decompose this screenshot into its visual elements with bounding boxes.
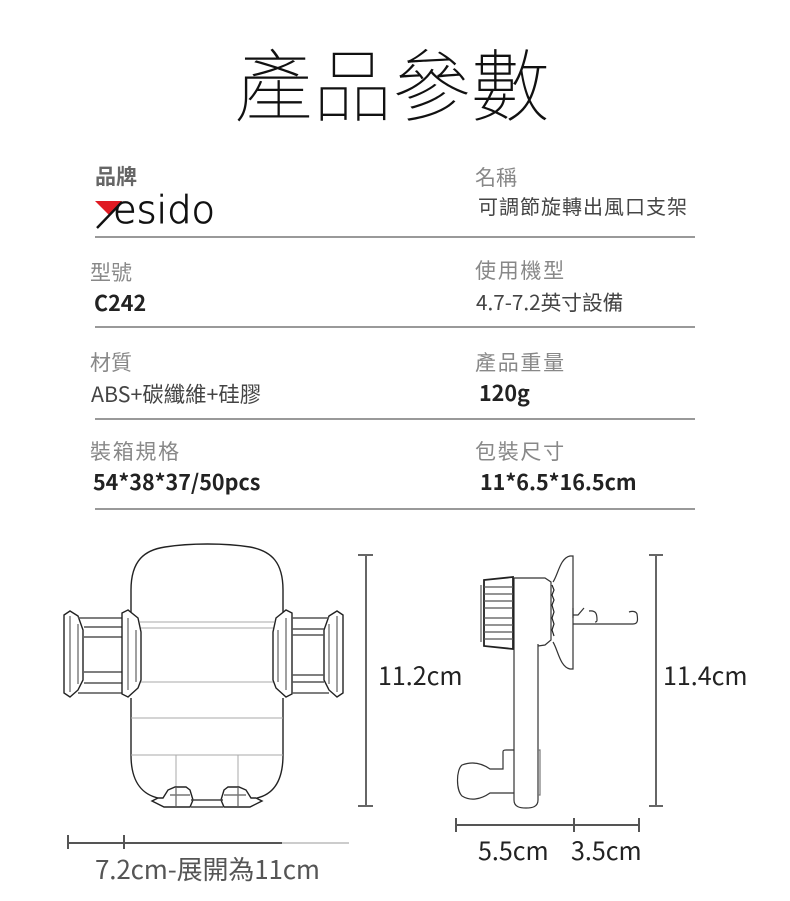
clip hooks: [573, 608, 638, 624]
height dimension: side: [649, 555, 663, 806]
divider 4: [95, 508, 695, 510]
value: material: ABS+碳纖維+硅膠: [91, 378, 261, 409]
label: carton size: 裝箱規格: [90, 436, 181, 466]
value: compatible models: 4.7-7.2英寸設備: [476, 286, 623, 316]
label: package size: 包裝尺寸: [475, 436, 566, 466]
label: brand: 品牌: [95, 161, 137, 191]
front view of phone holder: [64, 544, 343, 807]
suction plate: [553, 556, 573, 669]
ball joint: [458, 750, 514, 799]
width dimension: side: [456, 818, 639, 832]
right outer clamp: [292, 611, 343, 697]
width dimension: front: [68, 835, 349, 849]
divider 1: [95, 236, 695, 238]
knob: [484, 577, 513, 649]
value: model: C242: [94, 287, 146, 318]
side view of phone holder: [458, 556, 638, 808]
label: side width right: 3.5cm: [571, 832, 642, 868]
label: front height: 11.2cm: [378, 657, 462, 693]
value: carton size: 54*38*37/50pcs: [93, 466, 260, 497]
divider 2: [95, 326, 695, 328]
value: name: 可調節旋轉出風口支架: [478, 191, 688, 220]
label: side height: 11.4cm: [663, 657, 747, 693]
arm: [514, 578, 551, 808]
divider 3: [95, 418, 695, 420]
title: 產品參數: [234, 23, 550, 138]
value: product weight: 120g: [479, 377, 530, 408]
label: side width left: 5.5cm: [478, 832, 549, 868]
label: material: 材質: [90, 347, 132, 377]
bottom clamp: [152, 787, 262, 807]
height dimension: front: [358, 555, 373, 806]
label: compatible models: 使用機型: [475, 255, 566, 285]
label: front width: 7.2cm-展開為11cm: [95, 850, 320, 887]
label: name: 名稱: [475, 162, 517, 192]
right inner clamp: [273, 610, 292, 697]
label: product weight: 產品重量: [475, 347, 566, 377]
left inner clamp: [122, 610, 141, 697]
left outer clamp: [64, 611, 122, 697]
value: package size: 11*6.5*16.5cm: [480, 466, 637, 497]
label: model: 型號: [90, 257, 132, 287]
